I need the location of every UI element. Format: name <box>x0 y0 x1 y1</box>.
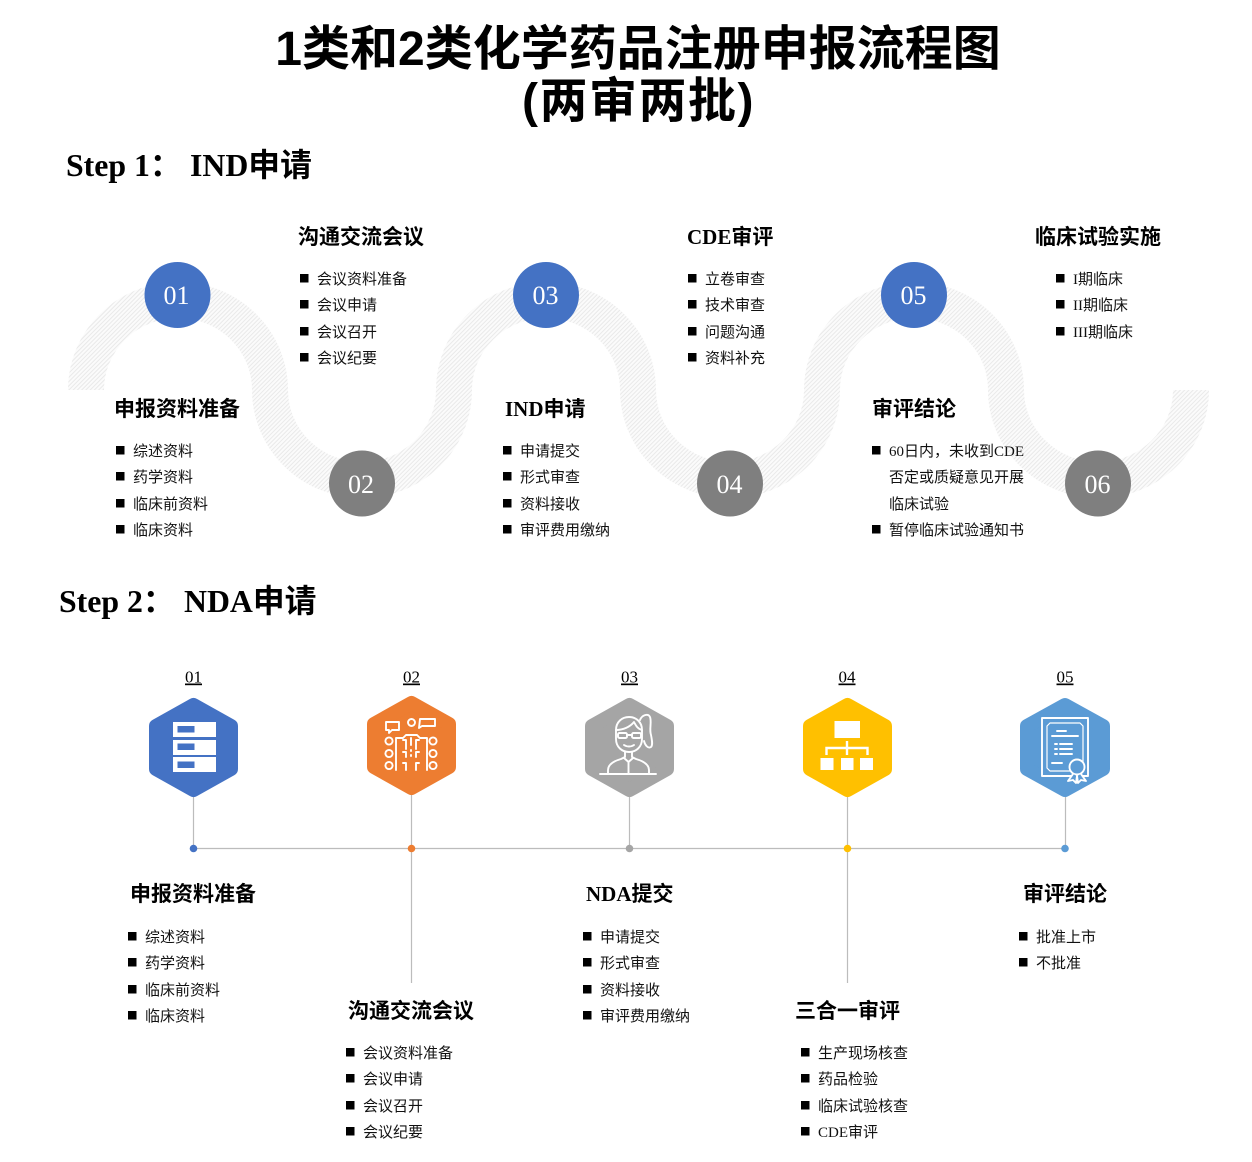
text block: 沟通交流会议: 会议申请 <box>317 297 377 314</box>
text block: IND申请: 申请提交 <box>520 442 580 460</box>
text block: 申报资料准备: 临床前资料 <box>133 496 208 513</box>
text block: 申报资料准备: 申报资料准备 <box>114 397 240 421</box>
icon: meeting people on orange hexagon <box>374 703 449 788</box>
number 02: 02 <box>403 668 420 686</box>
text block: 沟通交流会议: 会议资料准备 <box>363 1045 453 1062</box>
step 1 node 03 <box>513 262 579 328</box>
text block: 申报资料准备: 临床前资料 <box>145 982 220 999</box>
text block: 三合一审评: 药品检验 <box>818 1071 878 1088</box>
text block: 申报资料准备: 综述资料 <box>145 929 205 946</box>
icon: org chart on yellow hexagon <box>810 705 885 790</box>
text block: CDE审评 <box>687 225 773 367</box>
heading: step 1: IND申请 <box>190 148 312 183</box>
text block: 沟通交流会议: 沟通交流会议 <box>298 225 424 249</box>
step 1 node 02: 02 <box>348 470 374 499</box>
text block: NDA提交: 申请提交 <box>600 928 660 946</box>
text block: 沟通交流会议 <box>298 225 424 367</box>
text block: 三合一审评 <box>795 999 908 1141</box>
text block: 三合一审评: 生产现场核查 <box>818 1045 908 1062</box>
number 05: 05 <box>1056 668 1074 686</box>
step 1 node 05: 05 <box>900 281 926 310</box>
text block: 沟通交流会议: 会议召开 <box>317 324 377 341</box>
text block: 申报资料准备 <box>128 882 256 1025</box>
icon: woman with glasses on grey hexagon <box>592 705 667 790</box>
text block: 审评结论: 60日内，未收到CDE <box>889 443 1024 460</box>
text block: NDA提交: 资料接收 <box>600 982 660 999</box>
text block: 沟通交流会议: 会议召开 <box>363 1098 423 1115</box>
step 1 node 03: 03 <box>532 281 558 310</box>
text block: 审评结论: 审评结论 <box>1023 882 1107 906</box>
text block: IND申请: 资料接收 <box>520 496 580 513</box>
text block: 三合一审评: CDE审评 <box>818 1124 878 1141</box>
title <box>275 23 1001 128</box>
number 03: 03 <box>621 668 638 686</box>
heading: step 2: NDA申请 <box>184 584 316 619</box>
text block: 审评结论: 审评结论 <box>872 397 956 421</box>
step 1 node 02 <box>329 450 395 516</box>
text block: IND申请: 审评费用缴纳 <box>520 522 610 539</box>
text block: CDE审评: CDE审评 <box>687 225 773 249</box>
text block: 审评结论: 不批准 <box>1036 955 1081 972</box>
text block: 申报资料准备: 药学资料 <box>145 955 205 972</box>
icon: certificate on light blue hexagon <box>1027 705 1103 790</box>
step 1 node 04 <box>697 450 763 516</box>
text block: 申报资料准备: 临床资料 <box>133 522 193 539</box>
text block: CDE审评: 技术审查 <box>705 297 765 314</box>
text block: 沟通交流会议 <box>346 999 474 1141</box>
step 1 node 01 <box>144 262 210 328</box>
title: (两审两批) <box>522 75 755 128</box>
text block: 三合一审评: 三合一审评 <box>795 999 900 1023</box>
text block: 三合一审评: 临床试验核查 <box>818 1098 908 1115</box>
timeline connectors <box>194 793 1066 983</box>
heading: step 1: Step 1： <box>66 148 182 183</box>
text block: NDA提交: 审评费用缴纳 <box>600 1008 690 1025</box>
number 04: 04 <box>838 668 856 686</box>
text block: 审评结论: 暂停临床试验通知书 <box>889 522 1024 539</box>
timeline dots <box>190 845 1069 852</box>
text block: 申报资料准备: 临床资料 <box>145 1008 205 1025</box>
text block: 沟通交流会议: 会议纪要 <box>317 350 377 367</box>
text block: CDE审评: 立卷审查 <box>705 271 765 288</box>
wave track <box>86 300 1191 480</box>
text block: CDE审评: 问题沟通 <box>705 324 765 341</box>
text block: IND申请 <box>503 397 610 539</box>
text block: 审评结论 <box>872 397 1024 539</box>
text block: 沟通交流会议: 沟通交流会议 <box>348 999 474 1023</box>
step 1 node 06: 06 <box>1084 470 1110 499</box>
title: 1类和2类化学药品注册申报流程图 <box>275 23 1001 76</box>
icon: server stack on blue hexagon <box>156 705 231 790</box>
text block: 审评结论: 临床试验 <box>889 496 949 513</box>
text block: 申报资料准备: 综述资料 <box>133 443 193 460</box>
step 1 node 04: 04 <box>716 470 742 499</box>
text block: 沟通交流会议: 会议申请 <box>363 1071 423 1088</box>
text block: 审评结论 <box>1019 882 1107 972</box>
text block: 审评结论: 批准上市 <box>1036 929 1096 946</box>
text block: 沟通交流会议: 会议纪要 <box>363 1124 423 1141</box>
text block: 申报资料准备 <box>114 397 240 539</box>
text block: 临床试验实施: I期临床 <box>1073 271 1123 288</box>
text block: 沟通交流会议: 会议资料准备 <box>317 271 407 288</box>
step 1 node 05 <box>881 262 947 328</box>
text block: CDE审评: 资料补充 <box>705 350 765 367</box>
text block: NDA提交 <box>583 882 690 1025</box>
text block: 申报资料准备: 药学资料 <box>133 469 193 486</box>
heading: step 2: Step 2： <box>59 584 175 619</box>
step 1 node 01: 01 <box>164 281 190 310</box>
text block: IND申请: 形式审查 <box>520 469 580 486</box>
text block: 申报资料准备: 申报资料准备 <box>130 882 256 906</box>
heading: step 2 <box>59 584 316 619</box>
text block: NDA提交: NDA提交 <box>586 882 674 906</box>
text block: 审评结论: 否定或质疑意见开展 <box>889 468 1024 486</box>
step 1 node 06 <box>1065 450 1131 516</box>
text block: 临床试验实施: III期临床 <box>1073 324 1133 341</box>
text block: IND申请: IND申请 <box>505 397 586 421</box>
text block: 临床试验实施: 临床试验实施 <box>1035 225 1161 249</box>
heading: step 1 <box>66 148 312 183</box>
text block: NDA提交: 形式审查 <box>600 955 660 972</box>
number 01: 01 <box>185 668 202 686</box>
text block: 临床试验实施 <box>1035 225 1161 341</box>
text block: 临床试验实施: II期临床 <box>1073 297 1128 314</box>
